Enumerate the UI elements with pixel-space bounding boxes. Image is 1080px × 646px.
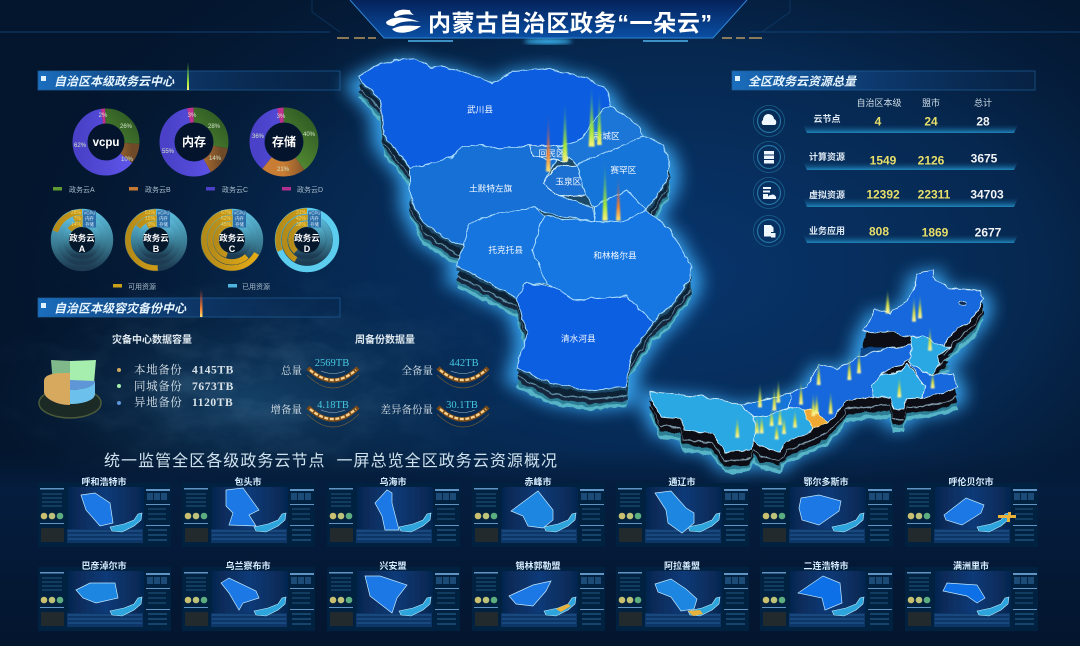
ring: cloud A bbox=[54, 210, 110, 268]
ring: cloud B: 9% bbox=[148, 222, 156, 228]
thumbnail: Erenhot bbox=[760, 560, 893, 631]
row: virtual: 22311 bbox=[918, 188, 951, 202]
thumbnail: Erenhot: 二连浩特市 bbox=[803, 560, 849, 571]
gauge: full backup: 全备量 bbox=[402, 364, 433, 377]
list: backup capacity: 1120TB bbox=[192, 397, 233, 409]
table: column headers bbox=[856, 97, 992, 108]
ring: cloud C: 存储 bbox=[235, 221, 244, 228]
ring: cloud C: VCPU bbox=[234, 210, 245, 216]
donut: memory: 55% bbox=[162, 149, 175, 155]
row: cloud nodes: 24 bbox=[924, 114, 938, 128]
labels: districts: 赛罕区 bbox=[610, 164, 637, 175]
thumbnail: Hinggan bbox=[327, 560, 460, 631]
ring: cloud D: 存储 bbox=[310, 221, 319, 228]
gauge: total bbox=[281, 358, 359, 388]
text: disaster center capacity heading: 灾备中心数据容量 bbox=[112, 333, 192, 346]
donut: storage: 40% bbox=[303, 132, 316, 138]
table: column headers: 自治区本级 bbox=[856, 97, 902, 108]
row: compute: 1549 bbox=[870, 154, 897, 168]
row: applications: 业务应用 bbox=[809, 225, 845, 236]
district: Saihan bbox=[577, 137, 670, 210]
legend: donuts: 政务云D bbox=[297, 185, 323, 194]
row: virtual: 虚拟资源 bbox=[809, 189, 845, 200]
title banner bbox=[0, 0, 1080, 44]
donut: storage: 36% bbox=[252, 134, 265, 140]
legend: donuts: 政务云A bbox=[69, 185, 95, 194]
labels: districts: 和林格尔县 bbox=[593, 250, 637, 261]
ring: cloud A: 存储 bbox=[85, 221, 94, 228]
ring: cloud C: C bbox=[229, 244, 236, 254]
thumbnail: Wuhai: 乌海市 bbox=[379, 476, 407, 487]
legend: rings: 可用资源 bbox=[128, 282, 156, 291]
thumbnail: Tongliao bbox=[616, 476, 749, 547]
thumbnail: Alxa bbox=[616, 560, 749, 631]
ring: cloud D: 内存 bbox=[310, 215, 319, 222]
district: Togtoh bbox=[457, 207, 547, 298]
row: cloud nodes bbox=[754, 106, 1018, 136]
gauge: full backup: 442TB bbox=[449, 358, 479, 369]
icon: virtual bbox=[763, 187, 776, 199]
thumbnail: Alxa: 阿拉善盟 bbox=[664, 560, 700, 571]
icon: cloud bbox=[762, 114, 776, 125]
gauge: total: 总量 bbox=[281, 364, 302, 377]
thumbnail: Hohhot bbox=[38, 476, 171, 547]
region: Bayannur bbox=[742, 393, 813, 452]
donut: memory bbox=[162, 113, 222, 169]
row: compute: 3675 bbox=[971, 152, 998, 166]
ring: cloud C: 45% bbox=[221, 222, 232, 228]
gauge: differential bbox=[380, 400, 489, 427]
thumbnail: Chifeng bbox=[472, 476, 605, 547]
gauge: differential: 差异备份量 bbox=[380, 403, 433, 416]
table: column headers: 盟市 bbox=[922, 97, 940, 108]
thumbnail: Wuhai bbox=[327, 476, 460, 547]
heading: total resources bbox=[732, 71, 1035, 90]
ring: cloud D: D bbox=[304, 244, 311, 254]
chart: 3D pie bbox=[39, 360, 101, 418]
heading: regional cloud center: 自治区本级政务云中心 bbox=[54, 74, 175, 88]
ring: cloud D: 38% bbox=[296, 222, 307, 228]
labels: districts: 清水河县 bbox=[561, 333, 596, 344]
thumbnail: Hohhot: 呼和浩特市 bbox=[81, 476, 127, 487]
map: Inner Mongolia bbox=[649, 270, 983, 474]
ring: cloud D bbox=[278, 210, 336, 269]
ring: cloud C: 62% bbox=[221, 216, 232, 222]
thumbnail: Ulanqab bbox=[182, 560, 315, 631]
beams: Hohhot markers bbox=[546, 83, 621, 221]
donut: storage: 存储 bbox=[272, 134, 296, 149]
thumbnail: Hulunbuir: 呼伦贝尔市 bbox=[948, 476, 994, 487]
heading: disaster backup center: 自治区本级容灾备份中心 bbox=[54, 302, 187, 316]
ring: cloud B bbox=[128, 210, 184, 268]
donut: vcpu: 26% bbox=[120, 124, 133, 130]
ring: cloud B: 15% bbox=[145, 216, 156, 222]
district: Wuchuan bbox=[358, 58, 612, 168]
gauge: incremental bbox=[270, 400, 359, 427]
row: virtual: 12392 bbox=[866, 188, 900, 202]
region: Hulunbuir bbox=[863, 270, 983, 347]
thumbnail: Ordos bbox=[760, 476, 893, 547]
district: Yuquan bbox=[543, 165, 585, 197]
ring: cloud D: 31% bbox=[296, 210, 307, 216]
thumbnail: Hulunbuir bbox=[905, 476, 1038, 547]
thumbnail: Manzhouli: 满洲里市 bbox=[953, 560, 989, 571]
labels: districts: 回民区 bbox=[539, 148, 565, 158]
list: backup capacity: 异地备份 bbox=[134, 395, 182, 409]
ring: cloud B: 51% bbox=[145, 210, 156, 216]
headline: 统一监管全区各级政务云节点 一屏总览全区政务云资源概况 bbox=[104, 452, 557, 470]
table: column headers: 总计 bbox=[974, 97, 992, 108]
labels: districts: 土默特左旗 bbox=[469, 183, 513, 194]
donut: vcpu: 10% bbox=[121, 157, 134, 163]
region: Chifeng bbox=[908, 362, 957, 397]
gap: sea between Hulunbuir and central bbox=[861, 347, 911, 357]
thumbnail: Xilingol bbox=[472, 560, 605, 631]
district: Tumed Left bbox=[410, 145, 595, 247]
ring: cloud A: 28% bbox=[71, 210, 82, 216]
row: applications: 808 bbox=[869, 224, 889, 238]
thumbnail: Baotou: 包头市 bbox=[234, 476, 262, 487]
thumbnail: Tongliao: 通辽市 bbox=[668, 476, 696, 487]
gauge: incremental: 4.18TB bbox=[317, 400, 349, 411]
thumbnail: Hinggan: 兴安盟 bbox=[379, 560, 407, 571]
ring: cloud C: 67% bbox=[221, 210, 232, 216]
donut: vcpu: 62% bbox=[74, 143, 87, 149]
row: applications: 2677 bbox=[975, 226, 1002, 240]
ring: cloud C: 政务云 bbox=[219, 233, 245, 243]
row: cloud nodes: 4 bbox=[875, 114, 882, 128]
ring: cloud D: 政务云 bbox=[294, 233, 320, 243]
gauge: total: 2569TB bbox=[315, 358, 349, 369]
ring: cloud B: 政务云 bbox=[143, 233, 169, 243]
row: applications: 1869 bbox=[922, 226, 949, 240]
region: Hinggan bbox=[908, 336, 950, 375]
donut: memory: 28% bbox=[208, 124, 221, 130]
ring: cloud B: B bbox=[153, 244, 160, 254]
thumbnail: Chifeng: 赤峰市 bbox=[524, 476, 552, 487]
labels: districts bbox=[467, 103, 637, 344]
thumbnail: Ulanqab: 乌兰察布市 bbox=[225, 560, 271, 571]
legend: donuts bbox=[53, 185, 323, 194]
icon: logo bbox=[386, 10, 421, 33]
donut: storage: 3% bbox=[277, 114, 286, 120]
district: Xincheng bbox=[557, 107, 643, 165]
region: central bbox=[790, 345, 912, 423]
row: virtual: 34703 bbox=[970, 188, 1004, 202]
row: compute: 2126 bbox=[918, 154, 945, 168]
heading: regional cloud center bbox=[38, 62, 340, 90]
ring: cloud A: VCPU bbox=[84, 210, 95, 216]
legend: donuts: 政务云C bbox=[222, 185, 248, 194]
thumbnail: Bayannur bbox=[38, 560, 171, 631]
legend: rings bbox=[113, 282, 270, 291]
thumbnail: Xilingol: 锡林郭勒盟 bbox=[515, 560, 561, 571]
heading: total resources: 全区政务云资源总量 bbox=[748, 74, 858, 88]
donut: vcpu bbox=[74, 113, 134, 168]
region: orange highlight bbox=[805, 410, 827, 430]
thumbnail: Bayannur: 巴彦淖尔市 bbox=[81, 560, 127, 571]
donut: vcpu: vcpu bbox=[93, 137, 119, 149]
ring: cloud A: 政务云 bbox=[69, 233, 95, 243]
donut: memory: 内存 bbox=[182, 134, 206, 149]
donut: memory: 3% bbox=[188, 113, 197, 119]
row: cloud nodes: 云节点 bbox=[813, 113, 841, 124]
text: weekly backup heading: 周备份数据量 bbox=[355, 333, 415, 346]
donut: storage bbox=[252, 114, 316, 173]
district: Horinger bbox=[532, 190, 692, 322]
labels: districts: 玉泉区 bbox=[555, 176, 582, 187]
list: backup capacity: 4145TB bbox=[192, 364, 234, 376]
list: backup capacity: 7673TB bbox=[192, 381, 234, 393]
row: compute bbox=[754, 142, 1018, 172]
thumbnail: Ordos: 鄂尔多斯市 bbox=[803, 476, 849, 487]
thumbnail: Baotou bbox=[182, 476, 315, 547]
row: compute: 计算资源 bbox=[809, 151, 845, 162]
ring: cloud A: 内存 bbox=[85, 215, 94, 222]
labels: districts: 新城区 bbox=[594, 130, 620, 141]
donut: vcpu: 2% bbox=[99, 113, 108, 119]
map: Hohhot districts bbox=[358, 58, 692, 411]
ring: cloud C bbox=[204, 210, 260, 268]
district: Huimin bbox=[530, 145, 567, 162]
row: applications bbox=[754, 216, 1018, 246]
heading: disaster backup center bbox=[38, 289, 340, 317]
ring: cloud B: 存储 bbox=[159, 221, 168, 228]
ring: cloud B: VCPU bbox=[158, 210, 169, 216]
donut: storage: 21% bbox=[277, 167, 290, 173]
district: Qingshuihe bbox=[517, 283, 653, 390]
region: Tongliao bbox=[872, 363, 925, 410]
icon: server bbox=[764, 151, 774, 164]
ring: cloud B: 内存 bbox=[159, 215, 168, 222]
ring: cloud A: A bbox=[79, 244, 86, 254]
thumbnail: Manzhouli bbox=[905, 560, 1038, 631]
list: backup capacity: 同城备份 bbox=[134, 380, 182, 393]
legend: rings: 已用资源 bbox=[242, 282, 270, 291]
gauge: full backup bbox=[402, 358, 489, 388]
region: Alxa bbox=[649, 392, 757, 452]
icon: document bbox=[764, 225, 776, 238]
ring: cloud A: 14% bbox=[71, 222, 82, 228]
list: backup capacity: 本地备份 bbox=[134, 362, 182, 376]
legend: donuts: 政务云B bbox=[145, 185, 171, 194]
gauge: differential: 30.1TB bbox=[446, 400, 478, 411]
row: cloud nodes: 28 bbox=[976, 114, 990, 128]
gauge: incremental: 增备量 bbox=[270, 403, 302, 416]
beams: region markers bbox=[735, 288, 935, 439]
list: backup capacity bbox=[117, 362, 234, 409]
row: virtual bbox=[754, 178, 1018, 208]
ring: cloud C: 内存 bbox=[235, 215, 244, 222]
title text: 内蒙古自治区政务“一朵云” bbox=[428, 10, 712, 36]
ring: cloud D: 42% bbox=[296, 216, 307, 222]
labels: districts: 托克托县 bbox=[488, 244, 523, 255]
ring: cloud A: 7% bbox=[74, 216, 82, 222]
donut: memory: 14% bbox=[209, 156, 222, 162]
ring: cloud D: VCPU bbox=[309, 210, 320, 216]
labels: districts: 武川县 bbox=[467, 103, 493, 114]
